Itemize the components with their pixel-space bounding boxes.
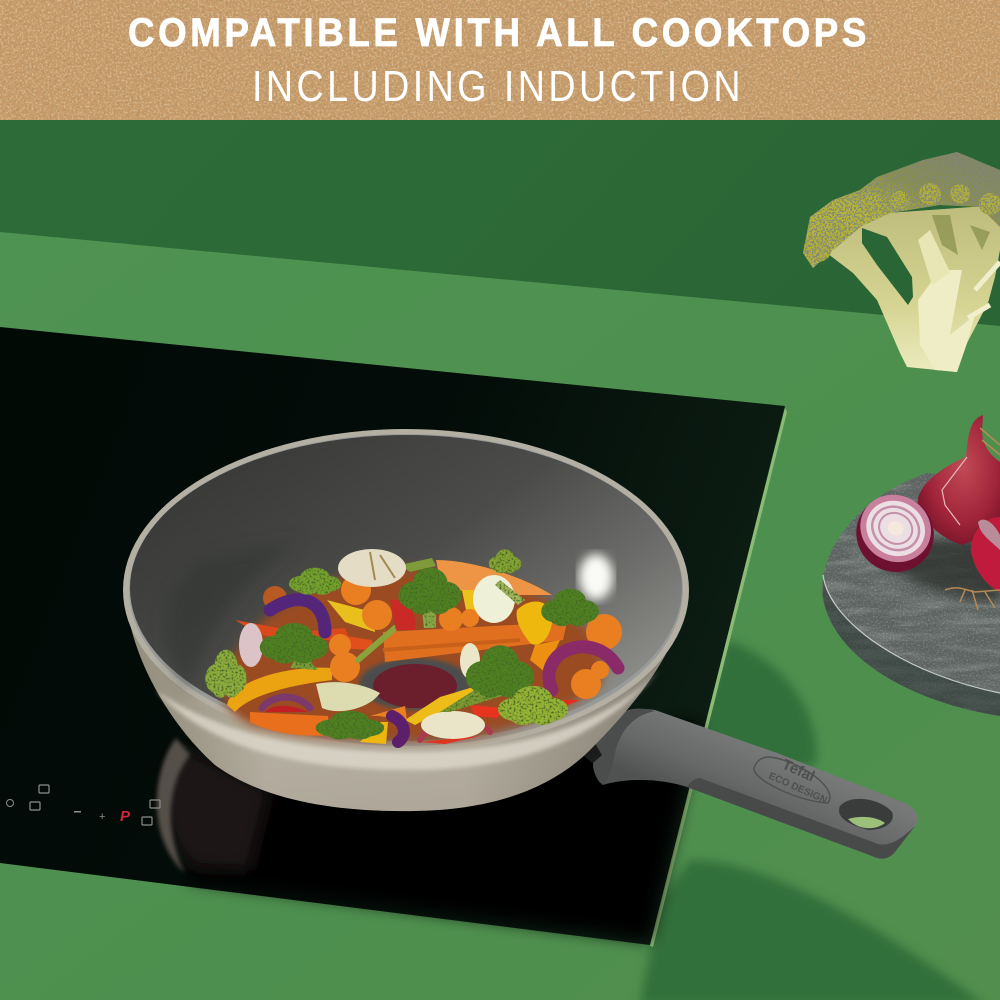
yellow peppers (517, 602, 552, 645)
pan body (125, 590, 688, 811)
banner (0, 0, 1000, 120)
stir-fry vegetables (205, 549, 622, 744)
onion shadow on board (880, 540, 1000, 600)
induction cooktop (0, 327, 787, 947)
cooktop green edge (649, 408, 787, 947)
cooktop controls (6, 785, 160, 825)
handle underside (687, 778, 915, 859)
cooktop reflection glow (165, 745, 270, 870)
pan rim (123, 429, 689, 751)
logo outline (754, 757, 830, 803)
highlight (579, 554, 613, 600)
handle (573, 709, 918, 859)
dark area under pan (190, 720, 700, 940)
onion piece (971, 517, 1000, 592)
handle collar (573, 709, 655, 785)
onion roots (945, 588, 1000, 610)
crown (803, 152, 1000, 268)
cooktop controls: P (120, 808, 131, 825)
cooktop reflection of pan (157, 738, 190, 873)
gap through stem showing wall (862, 228, 913, 305)
stem (823, 205, 1000, 372)
broccoli florets (205, 549, 599, 739)
counter shadows (640, 640, 985, 1000)
marble board (820, 470, 1000, 720)
broccoli (803, 152, 1000, 372)
handle hole (839, 799, 893, 830)
handle: ECO DESIGN (767, 771, 829, 806)
subheading: INCLUDING INDUCTION (252, 62, 744, 111)
garlic and white pieces (338, 549, 406, 587)
pan interior (129, 434, 683, 746)
carrot rounds (263, 575, 622, 720)
lower left shadow in pan (165, 540, 300, 690)
carrots and peppers (383, 622, 567, 662)
red onions (843, 415, 1000, 610)
green stem piece (358, 628, 395, 660)
heading: COMPATIBLE WITH ALL COOKTOPS (128, 11, 870, 55)
onion half (843, 482, 947, 586)
food base (222, 567, 603, 741)
wall (0, 120, 1000, 335)
red sauce spot (373, 664, 457, 708)
red onion pieces (262, 600, 618, 742)
handle logo: Tefal (779, 756, 817, 785)
frying pan (123, 429, 918, 859)
whole onion (918, 415, 1000, 545)
pan floor patch (359, 658, 471, 710)
counter top (0, 232, 1000, 1000)
cooktop controls: + (99, 811, 105, 823)
